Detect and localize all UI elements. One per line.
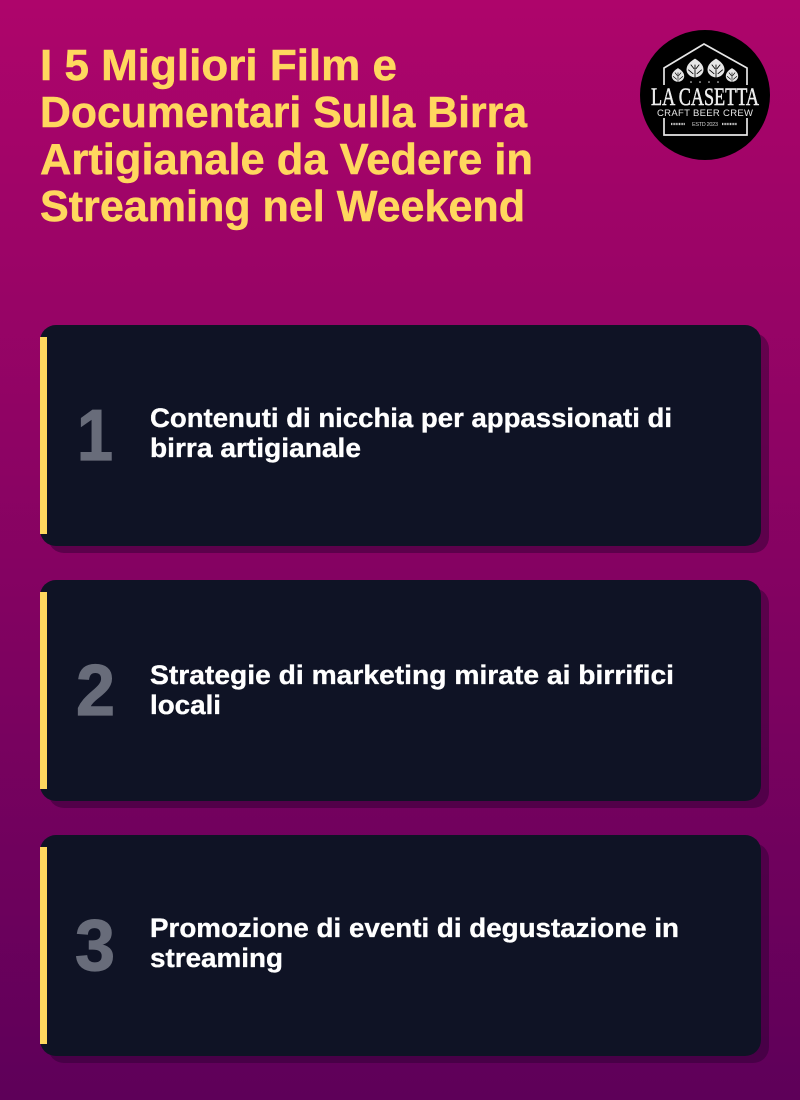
logo: La Casetta Craft Beer Crew: LA CASETTA (651, 84, 759, 111)
number: 2 (76, 651, 115, 731)
accent bar (40, 337, 47, 534)
item text (150, 403, 672, 463)
title: Streaming nel Weekend (40, 182, 525, 231)
item text: Promozione di eventi di degustazione in (150, 913, 679, 943)
item text: locali (150, 690, 221, 720)
title (40, 41, 533, 231)
item text (150, 913, 679, 973)
accent bar (40, 592, 47, 789)
number: 1 (77, 396, 113, 476)
panel: item 3 (40, 835, 769, 1063)
item text: Strategie di marketing mirate ai birrifici (150, 660, 674, 690)
logo: La Casetta Craft Beer Crew (640, 30, 770, 160)
accent bar (40, 847, 47, 1044)
panel: item 1 (40, 325, 769, 553)
item text: Contenuti di nicchia per appassionati di (150, 403, 672, 433)
logo: La Casetta Craft Beer Crew: ESTD 2023 (692, 122, 718, 128)
item text (150, 660, 674, 720)
title: Artigianale da Vedere in (40, 135, 533, 184)
item text: birra artigianale (150, 433, 361, 463)
title: Documentari Sulla Birra (40, 88, 528, 137)
logo: La Casetta Craft Beer Crew: CRAFT BEER CREW (657, 108, 753, 119)
item text: streaming (150, 943, 283, 973)
number: 3 (75, 906, 115, 986)
panel: item 2 (40, 580, 769, 808)
title: I 5 Migliori Film e (40, 41, 397, 90)
